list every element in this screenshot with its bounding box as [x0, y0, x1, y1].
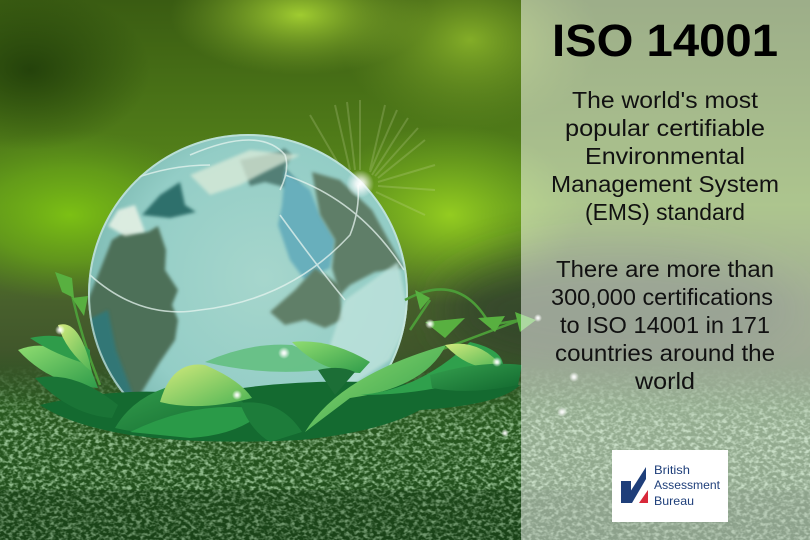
logo: British Assessment Bureau	[612, 450, 728, 522]
logo wordmark	[654, 463, 721, 508]
text block: statistics: 300,000 certifications	[551, 284, 773, 310]
globe: ocean blue	[278, 170, 335, 280]
globe: dark land top	[240, 148, 300, 190]
panel: translucent text column	[521, 0, 810, 540]
globe: white cloud highlights	[108, 205, 145, 236]
text block: description: Management System	[551, 171, 779, 197]
text block: description: The world's most	[572, 87, 759, 113]
globe: Australia-like land	[270, 268, 342, 328]
sparkle lights	[55, 170, 579, 437]
title: ISO 14001	[552, 15, 778, 66]
glass globe	[88, 134, 408, 392]
sun rays behind globe	[310, 100, 435, 215]
logo wordmark: British	[654, 463, 690, 477]
logo wordmark: Bureau	[654, 494, 694, 508]
text block: description: (EMS) standard	[585, 199, 745, 225]
leaves around globe base	[18, 324, 522, 442]
text block: statistics: world	[634, 368, 695, 394]
globe: dark continent left	[88, 226, 178, 395]
text block: description: Environmental	[585, 143, 745, 169]
globe: latitude and longitude lines	[90, 140, 404, 312]
globe: dark continent upper left	[142, 182, 196, 218]
text block: statistics: to ISO 14001 in 171	[560, 312, 770, 338]
text block: statistics: countries around the	[555, 340, 775, 366]
text block: description: popular certifiable	[565, 115, 765, 141]
leaf mass: dark base	[40, 382, 520, 442]
text block: statistics	[551, 256, 775, 394]
icon: blue and red check mark	[621, 467, 648, 503]
globe: dark continent right	[312, 172, 404, 295]
plant stems and small leaves	[55, 272, 536, 385]
text block: description	[551, 87, 779, 225]
grass meadow	[0, 350, 810, 540]
text block: statistics: There are more than	[556, 256, 774, 282]
logo wordmark: Assessment	[654, 478, 721, 492]
